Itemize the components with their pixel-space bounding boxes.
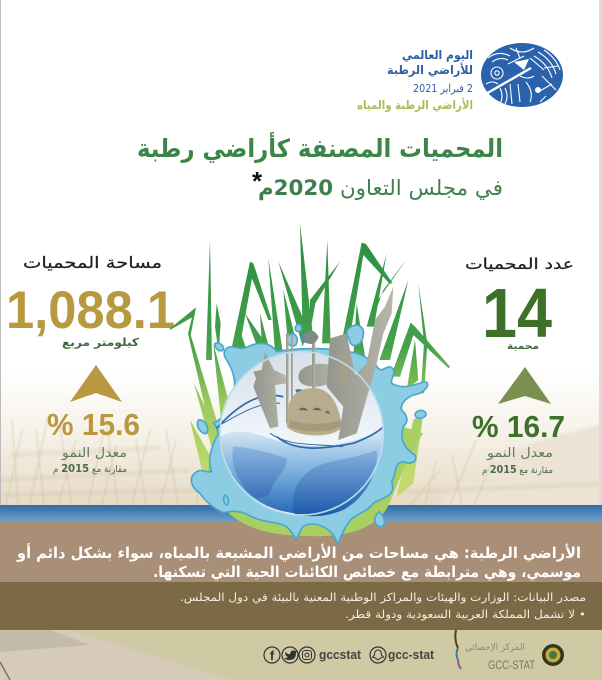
icon: instagram — [299, 647, 315, 663]
logo text — [357, 48, 473, 113]
emblem stripes — [455, 630, 461, 669]
arabic name: المركز الإحصائي — [465, 643, 525, 653]
footnote asterisk: * — [252, 166, 263, 196]
subtitle: في مجلس التعاون 2020م — [258, 176, 503, 200]
panel: protected area count — [465, 255, 574, 476]
logo text: الأراضي الرطبة والمياه — [357, 97, 473, 113]
title: المحميات المصنفة كأراضي رطبة — [137, 132, 503, 163]
icon: facebook: f — [270, 648, 275, 663]
logo text: للأراضي الرطبة — [387, 62, 473, 77]
logo: GCC-STAT — [455, 630, 536, 672]
text block: data source — [180, 591, 586, 621]
number: count: 14 — [482, 274, 552, 352]
unit: square km: كيلومتر مربع — [62, 336, 140, 349]
icon: twitter — [282, 647, 298, 663]
sand dunes background — [0, 370, 602, 507]
text block: wetlands definition: الأراضي الرطبة: هي مساحات من الأراضي المشبعة بالمياه، سواء بشكل دائم أو — [16, 543, 581, 562]
logo text: اليوم العالمي — [402, 48, 473, 63]
landmark towers — [253, 287, 393, 440]
water splash — [191, 324, 428, 544]
grass blades — [170, 223, 450, 497]
logo: GCC seal — [542, 644, 564, 666]
number: area: 1,088.1 — [6, 281, 175, 340]
underlay: light green — [207, 420, 423, 536]
text block: wetlands definition: موسمي، وهي مترابطة مع خصائص الكائنات الحية التي تسكنها. — [153, 563, 581, 581]
heading: count: عدد المحميات — [465, 255, 574, 273]
icon: up arrow gold — [70, 365, 122, 402]
logo: world wetlands day emblem — [481, 43, 563, 107]
text block: wetlands definition — [16, 543, 581, 581]
label: compared with 2015: مقارنة مع 2015 م — [53, 462, 127, 475]
social media handles — [264, 647, 435, 663]
blue water drop — [302, 332, 318, 343]
continents — [232, 447, 377, 516]
globe ocean — [220, 427, 383, 513]
handle: gcc-stat: gcc-stat — [388, 647, 435, 662]
number: area growth: % 15.6 — [47, 407, 140, 442]
icon: facebook — [264, 647, 280, 663]
icon: up arrow green — [498, 367, 551, 404]
text block: data source: • لا تشمل المملكة العربية السعودية ودولة قطر. — [345, 608, 586, 621]
globe rim — [220, 352, 383, 515]
unit: reserve: محمية — [507, 341, 539, 352]
central illustration: grass, water splash, globe and landmarks — [170, 223, 450, 544]
panel: protected area size — [6, 253, 175, 475]
heading: area: مساحة المحميات — [23, 253, 162, 272]
number: count growth: % 16.7 — [472, 409, 565, 444]
icon: snapchat — [370, 647, 386, 663]
latin name: GCC-STAT — [488, 658, 536, 672]
page edge lines — [0, 0, 602, 506]
bottom bands — [0, 505, 602, 680]
logo text: 2 فبراير 2021 — [413, 82, 473, 95]
handle: gccstat: gccstat — [319, 647, 362, 662]
label: growth rate: معدل النمو — [61, 446, 127, 461]
text block: data source: مصدر البيانات: الوزارت والهيئات والمراكز الوطنية المعنية بالبيئة في دول المجلس. — [180, 591, 586, 604]
glass globe upper — [220, 352, 383, 515]
label: compared with 2015: مقارنة مع 2015 م — [482, 463, 553, 476]
label: growth rate: معدل النمو — [486, 446, 553, 461]
water line — [217, 395, 383, 448]
